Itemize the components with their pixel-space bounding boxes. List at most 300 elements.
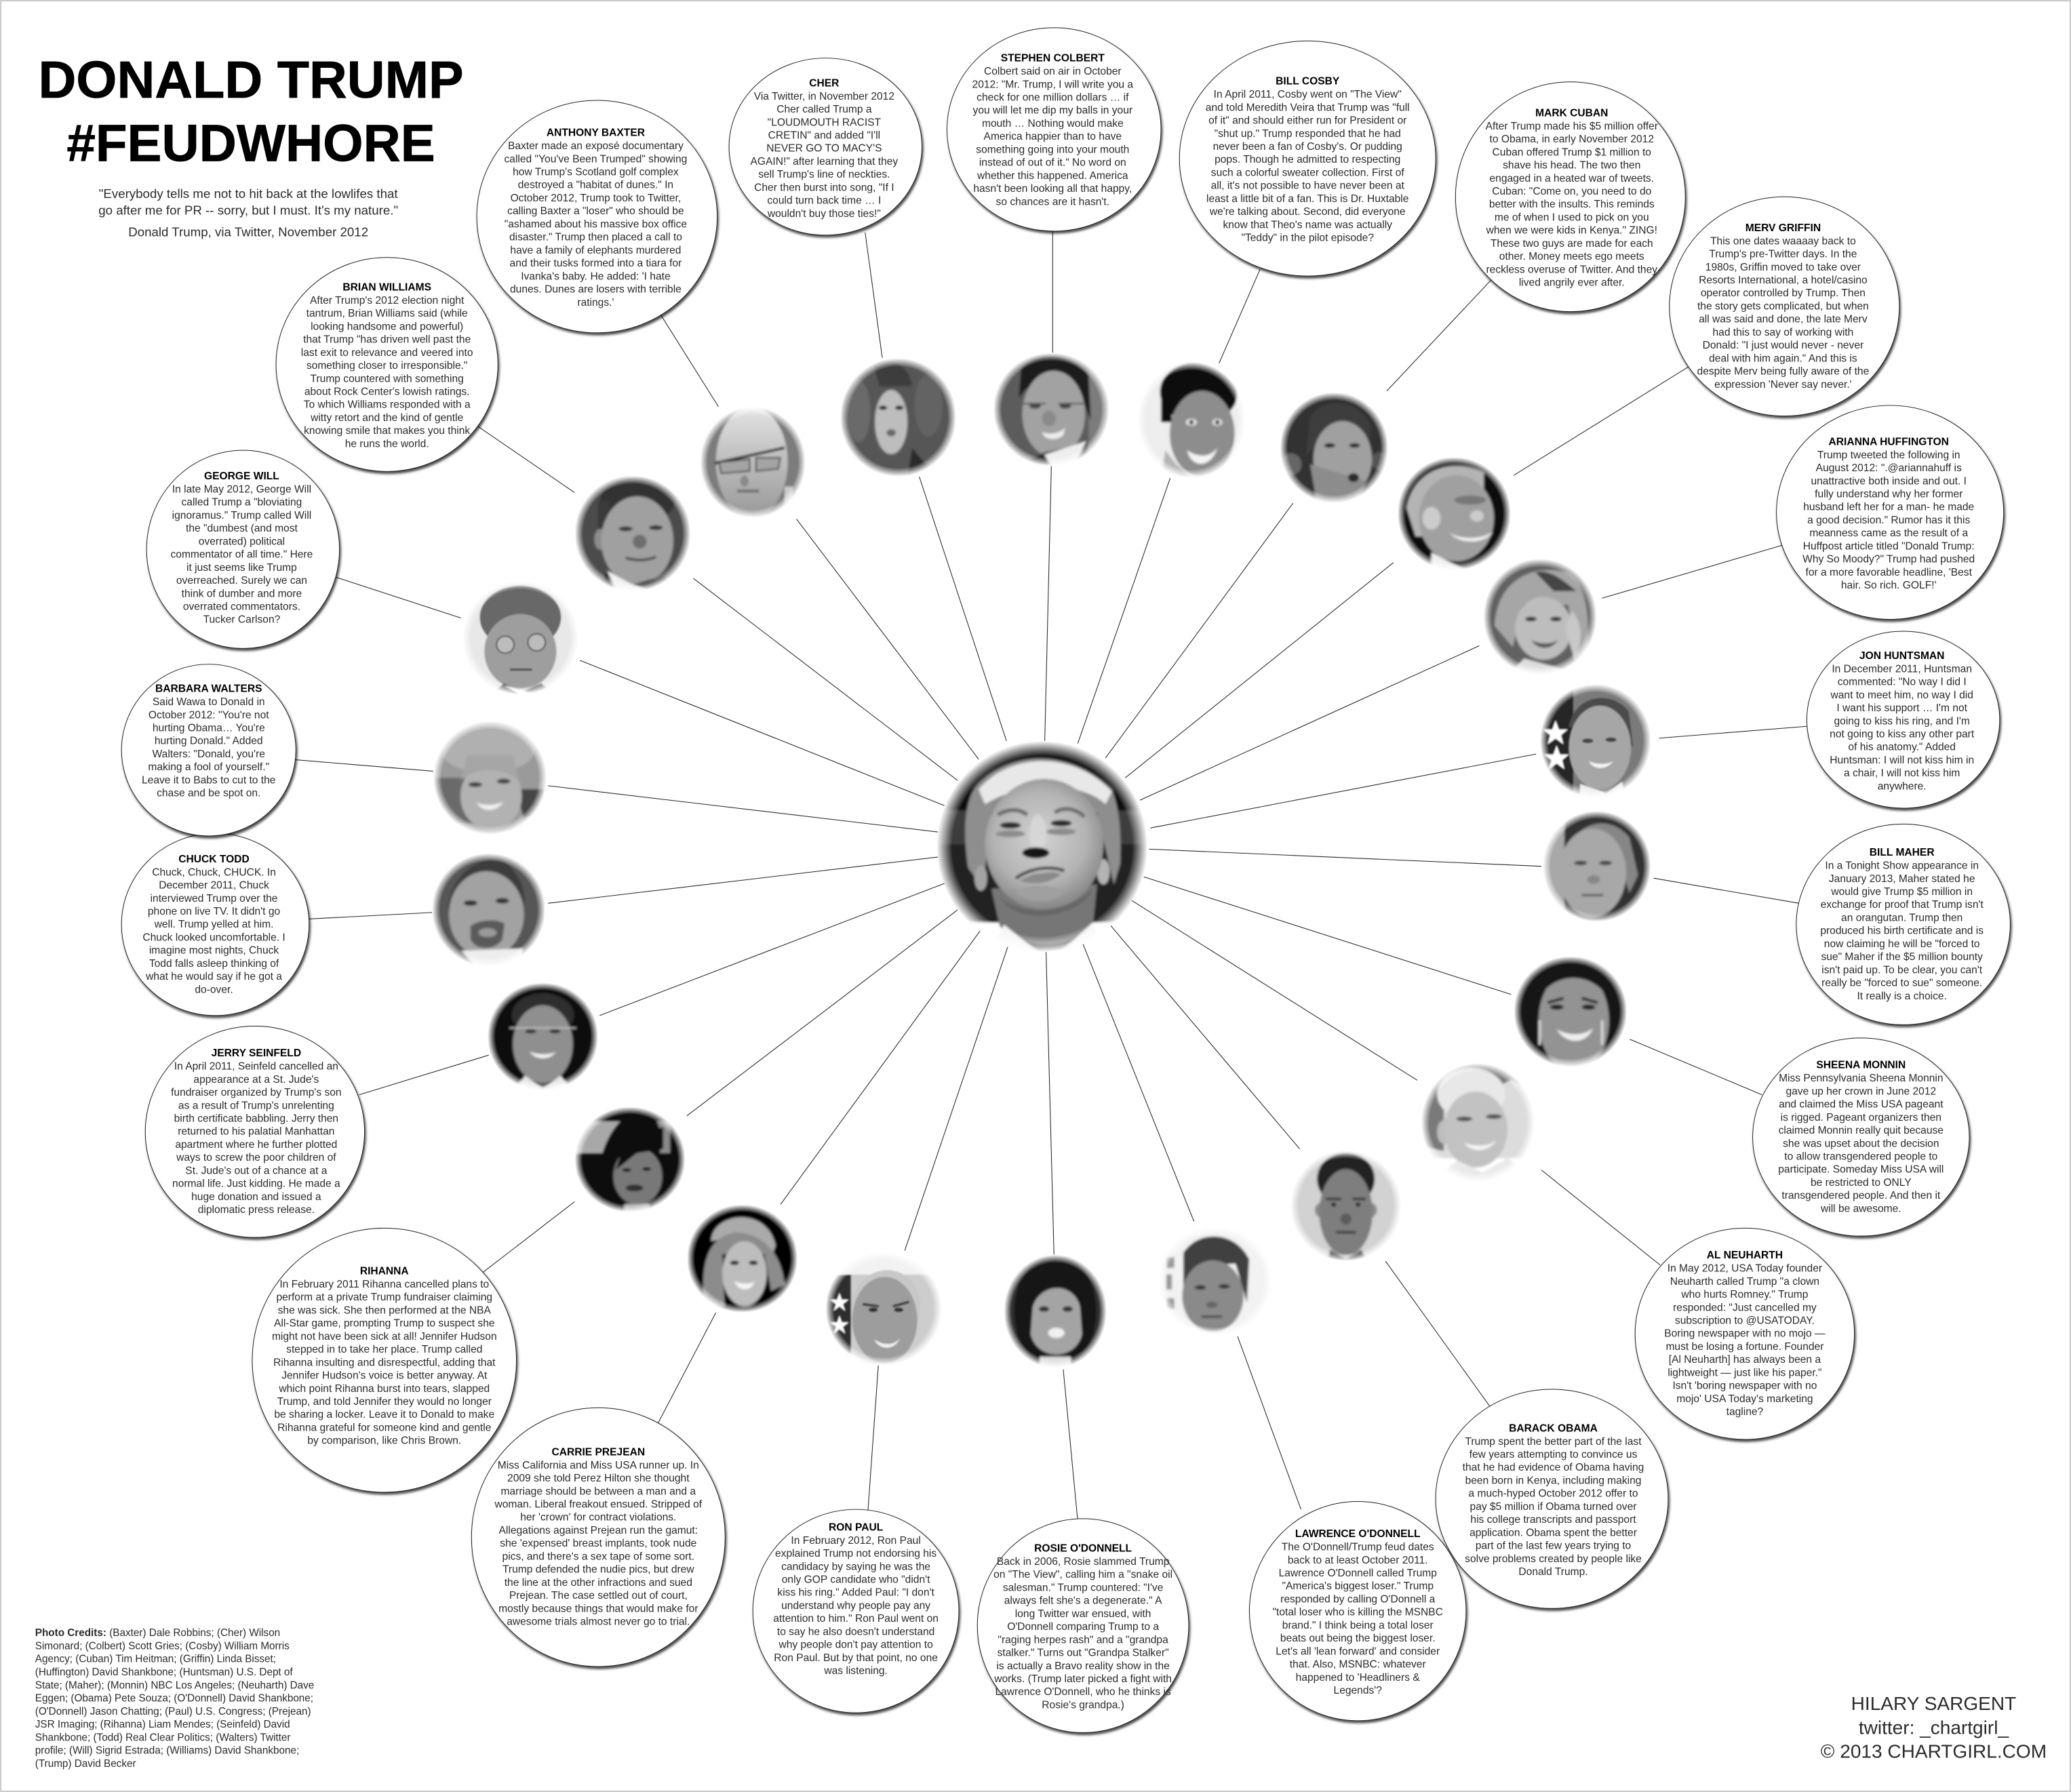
quote: go after me for PR -- sorry, but I must. It's my nature." [98, 203, 398, 217]
body: claimed Monnin really quit because [1779, 1125, 1944, 1136]
name: BILL MAHER [1870, 847, 1935, 858]
bubble: Jon Huntsman [1807, 631, 2000, 808]
body: candidacy by saying he was the [781, 1561, 930, 1572]
name: JERRY SEINFELD [212, 1048, 301, 1059]
body: she 'expensed' breast implants, took nude [500, 1538, 696, 1549]
name: BILL COSBY [1276, 76, 1340, 87]
body: Isn't 'boring newspaper with no [1672, 1380, 1817, 1392]
photo: Brian Williams [574, 475, 691, 592]
title: #FEUDWHORE [66, 115, 435, 173]
body: 2009 she told Perez Hilton she thought [507, 1473, 690, 1484]
body: Trump tweeted the following in [1817, 450, 1960, 461]
body: Back in 2006, Rosie slammed Trump [997, 1556, 1170, 1568]
body: mostly because things that would make for [498, 1603, 698, 1614]
photo credits: JSR Imaging; (Rihanna) Liam Mendes; (Seinfeld) David [35, 1719, 290, 1730]
body: CRETIN" and added "I'll [768, 130, 880, 142]
body: other. Money meets ego meets [1499, 251, 1644, 262]
body: In May 2012, USA Today founder [1668, 1263, 1822, 1275]
photo credits: (Baxter) Dale Robbins; (Cher) Wilson [106, 1627, 280, 1639]
photo: Merv Griffin [1398, 457, 1511, 570]
body: pics, and there's a sex tape of some sort. [502, 1551, 694, 1562]
body: last exit to relevance and veered into [301, 347, 473, 359]
bubble: Stephen Colbert [947, 28, 1161, 231]
bubble: Bill Cosby [1179, 41, 1436, 276]
body: husband left her for a man- he made [1803, 502, 1974, 513]
body: the "dumbest (and most [186, 523, 298, 534]
body: a chair, I will not kiss him [1844, 768, 1960, 779]
body: called Trump a "bloviating [181, 497, 302, 509]
bubble: Arianna Huffington [1777, 405, 2004, 619]
body: Trump, and told Jennifer they would no longer [277, 1396, 492, 1408]
photo: Anthony Baxter [700, 407, 806, 517]
body: tagline? [1727, 1406, 1764, 1418]
body: Donald: "I just would never - never [1703, 340, 1863, 351]
body: Miss Pennsylvania Sheena Monnin [1779, 1073, 1944, 1084]
body: how Trump's Scotland golf complex [513, 167, 679, 178]
body: few years attempting to convince us [1470, 1449, 1638, 1460]
body: mojo' USA Today's marketing [1676, 1393, 1813, 1405]
body: After Trump's 2012 election night [310, 295, 465, 306]
body: making a fool of yourself." [148, 761, 269, 773]
name: ARIANNA HUFFINGTON [1829, 436, 1949, 447]
body: gave up her crown in June 2012 [1786, 1086, 1936, 1097]
body: hurting Donald." Added [155, 736, 263, 747]
photo credits: Shankbone; (Todd) Real Clear Politics; (Walters) Twitter [35, 1732, 291, 1743]
body: ratings.' [577, 297, 614, 308]
photo credits: (Huffington) David Shankbone; (Huntsman) U.S. Dept of [35, 1667, 293, 1678]
body: woman. Liberal freakout ensued. Stripped of [494, 1498, 703, 1510]
body: Cher called Trump a [776, 104, 872, 115]
quote: Donald Trump, via Twitter, November 2012 [128, 225, 368, 239]
body: witty retort and the kind of gentle [310, 412, 463, 424]
body: In December 2011, Huntsman [1832, 663, 1972, 675]
photo: Ron Paul [825, 1252, 942, 1366]
body: expression 'Never say never.' [1714, 379, 1852, 391]
body: O'Donnell comparing Trump to a [1007, 1621, 1159, 1633]
name: MARK CUBAN [1535, 107, 1608, 119]
body: be restricted to ONLY [1811, 1177, 1912, 1189]
body: Let's all 'lean forward' and consider [1276, 1646, 1440, 1657]
body: It really is a choice. [1857, 991, 1947, 1002]
body: dunes. Dunes are losers with terrible [510, 284, 682, 296]
body: huge donation and issued a [191, 1191, 321, 1203]
body: an orangutan. Trump then [1841, 912, 1962, 923]
body: overrated commentators. [183, 601, 300, 612]
body: and told Meredith Veira that Trump was "full [1206, 102, 1410, 113]
name: JON HUNTSMAN [1859, 650, 1944, 662]
body: you will let me dip my balls in your [973, 105, 1132, 117]
body: Huffpost article titled "Donald Trump: [1803, 540, 1975, 552]
body: something closer to irresponsible." [307, 360, 467, 372]
bubble: Sheena Monnin [1753, 1038, 1969, 1236]
body: by comparison, like Chris Brown. [307, 1435, 461, 1447]
body: exchange for proof that Trump isn't [1821, 899, 1984, 911]
body: hasn't been looking all that happy, [973, 183, 1132, 195]
bubble: Brian Williams [276, 258, 498, 471]
bubble: Chuck Todd [121, 833, 309, 1016]
photo: Mark Cuban [1280, 392, 1388, 503]
body: not going to kiss any other part [1830, 728, 1975, 740]
body: In a Tonight Show appearance in [1825, 860, 1979, 872]
photo credits: State; (Maher); (Monnin) NBC Los Angeles; (Neuharth) Dave [35, 1679, 314, 1691]
photo: Bill Cosby [1137, 361, 1246, 478]
body: such a colorful sweater collection. First of [1211, 167, 1404, 178]
body: explained Trump not endorsing his [775, 1548, 936, 1559]
body: attention to him." Ron Paul went on [773, 1613, 939, 1625]
name: ROSIE O'DONNELL [1034, 1543, 1132, 1555]
body: imagine most nights, Chuck [149, 945, 279, 957]
body: perform at a private Trump fundraiser claiming [276, 1292, 492, 1303]
body: the story gets complicated, but when [1697, 300, 1869, 312]
body: something going into your mouth [976, 144, 1129, 155]
bubble: Barbara Walters [121, 664, 296, 836]
body: Chuck looked uncomfortable. I [142, 932, 285, 943]
body: tantrum, Brian Williams said (while [307, 308, 468, 319]
bubble: Carrie Prejean [471, 1408, 725, 1667]
author credit [1821, 1693, 2047, 1761]
photo: Chuck Todd [432, 853, 545, 967]
body: least a little bit of a fan. This is Dr. Huxtable [1206, 193, 1408, 205]
body: chase and be spot on. [157, 788, 260, 799]
body: is rigged. Pageant organizers then [1781, 1112, 1941, 1123]
quote [98, 186, 398, 239]
body: October 2012: "You're not [149, 709, 269, 721]
body: his college transcripts and passport [1470, 1514, 1636, 1526]
body: Why So Moody?" Trump had pushed [1802, 554, 1975, 565]
body: the line at the other infractions and sued [505, 1577, 692, 1589]
body: me of when I used to pick on you [1495, 212, 1649, 223]
body: whether this happened. America [977, 170, 1128, 182]
body: despite Merv being fully aware of the [1697, 366, 1869, 378]
body: Tucker Carlson? [203, 614, 281, 626]
body: deal with him again." And this is [1709, 353, 1857, 364]
photo credits: (Trump) David Becker [35, 1758, 136, 1770]
body: mouth … Nothing would make [982, 118, 1124, 130]
body: Todd falls asleep thinking of [149, 958, 279, 970]
body: "ashamed about his massive box office [505, 218, 687, 230]
body: St. Jude's out of a chance at a [185, 1165, 328, 1176]
body: anywhere. [1878, 780, 1927, 792]
body: we're talking about. Second, did everyone [1209, 206, 1406, 218]
body: of it" and should either run for President or [1208, 115, 1406, 127]
body: must be losing a fortune. Founder [1665, 1341, 1823, 1353]
body: The O'Donnell/Trump feud dates [1282, 1542, 1434, 1553]
body: responded: "Just cancelled my [1673, 1302, 1817, 1313]
body: Trump countered with something [311, 373, 464, 384]
body: I want his support … I'm not [1836, 702, 1968, 714]
photo credits: Photo Credits: [35, 1627, 106, 1639]
body: Colbert said on air in October [984, 66, 1122, 77]
body: ways to screw the poor children of [176, 1152, 336, 1163]
body: Trump defended the nudie pics, but drew [502, 1564, 694, 1576]
body: operator controlled by Trump. Then [1701, 287, 1866, 299]
body: Baxter made an exposé documentary [508, 140, 684, 152]
body: overreached. Surely we can [176, 575, 307, 586]
author credit: twitter: _chartgirl_ [1859, 1717, 2009, 1738]
body: In February 2011 Rihanna cancelled plans to [279, 1279, 490, 1290]
body: Walters: "Donald, you're [153, 749, 265, 760]
body: knowing smile that makes you think [304, 425, 470, 437]
body: In April 2011, Cosby went on "The View" [1214, 89, 1402, 100]
body: "Teddy" in the pilot episode? [1241, 233, 1374, 244]
body: commented: "No way I did I [1838, 677, 1967, 688]
body: Lawrence O'Donnell called Trump [1279, 1568, 1437, 1579]
body: Allegations against Prejean run the gamut: [499, 1525, 698, 1536]
body: In February 2012, Ron Paul [791, 1535, 921, 1547]
photo: George Will [462, 581, 578, 694]
body: Cher then burst into song, "If I [754, 182, 894, 193]
title: DONALD TRUMP [38, 51, 464, 109]
body: stalker." Turns out "Grandpa Stalker" [998, 1648, 1169, 1659]
body: Miss California and Miss USA runner up. In [498, 1460, 699, 1471]
body: looking handsome and powerful) [311, 321, 463, 332]
bubble: Jerry Seinfeld [145, 1026, 365, 1237]
body: destroyed a "habitat of dunes." In [518, 180, 673, 191]
body: for a more favorable headline, 'Best [1805, 567, 1973, 578]
body: had this to say of working with [1712, 327, 1853, 338]
body: might not have been sick at all! Jennifer Hudson [272, 1331, 497, 1342]
photo: Arianna Huffington [1483, 559, 1597, 675]
body: engaged in a heated war of tweets. [1490, 173, 1654, 184]
title [38, 51, 464, 173]
body: wouldn't buy those ties!" [767, 208, 881, 220]
photo: Barbara Walters [433, 721, 547, 835]
body: Legends'? [1334, 1685, 1382, 1696]
body: about Rock Center's lowish ratings. [304, 386, 470, 398]
body: participate. Someday Miss USA will [1778, 1164, 1944, 1176]
body: who hurts Romney." Trump [1680, 1289, 1809, 1300]
body: August 2012: ".@ariannahuff is [1816, 462, 1962, 474]
body: Rihanna grateful for someone kind and gentle [277, 1422, 491, 1433]
body: disaster." Trump then placed a call to [509, 232, 682, 243]
body: This one dates waaaay back to [1710, 235, 1856, 247]
body: Leave it to Babs to cut to the [142, 774, 275, 786]
body: going to kiss his ring, and I'm [1834, 715, 1970, 727]
body: Ron Paul. But by that point, no one [774, 1652, 938, 1664]
body: 1980s, Griffin moved to take over [1705, 262, 1861, 273]
body: solve problems created by people like [1465, 1553, 1642, 1565]
photo: Carrie Prejean [687, 1204, 797, 1313]
body: Donald Trump. [1518, 1566, 1588, 1578]
body: birth certificate babbling. Jerry then [174, 1113, 338, 1125]
body: [Al Neuharth] has always been a [1669, 1354, 1821, 1366]
body: her 'crown' for contract violations. [520, 1512, 676, 1524]
body: that. Also, MSNBC: whatever [1290, 1659, 1426, 1671]
bubble: Bill Maher [1796, 824, 2010, 1024]
body: think of dumber and more [182, 588, 302, 599]
body: pops. Though he admitted to respecting [1215, 154, 1400, 165]
body: marriage should be between a man and a [501, 1486, 696, 1497]
author credit: HILARY SARGENT [1851, 1693, 2016, 1714]
photo: Sheena Monnin [1514, 956, 1628, 1071]
body: want to meet him, no way I did [1830, 690, 1973, 701]
body: happened to 'Headliners & [1296, 1672, 1420, 1684]
body: when we were kids in Kenya." ZING! [1486, 225, 1657, 237]
photo: Al Neuharth [1421, 1063, 1535, 1182]
body: Boring newspaper with no mojo — [1664, 1328, 1826, 1340]
name: GEORGE WILL [204, 471, 279, 482]
body: have a family of elephants murdered [510, 245, 681, 256]
name: STEPHEN COLBERT [1001, 53, 1105, 64]
body: sue" Maher if the $5 million bounty [1821, 951, 1983, 963]
body: back to at least October 2011. [1288, 1555, 1428, 1566]
body: America happier than to have [984, 131, 1122, 142]
body: it just seems like Trump [186, 562, 297, 574]
body: interviewed Trump over the [151, 893, 277, 904]
body: transgendered people. And then it [1781, 1190, 1941, 1201]
body: phone on live TV. It didn't go [148, 906, 280, 917]
body: to allow transgendered people to [1784, 1151, 1938, 1162]
body: Lawrence O'Donnell, who he thinks is [995, 1686, 1171, 1698]
body: All-Star game, prompting Trump to suspect she [274, 1318, 495, 1330]
body: Chuck, Chuck, CHUCK. In [152, 867, 276, 878]
bubble: Lawrence O'Donnell [1250, 1502, 1466, 1721]
body: reckless overuse of Twitter. And they [1486, 264, 1657, 275]
body: To which Williams responded with a [304, 399, 471, 411]
name: RIHANNA [360, 1266, 409, 1277]
body: really be "forced to sue" someone. [1821, 978, 1982, 989]
body: Ivanka's baby. He added: 'I hate [521, 271, 671, 282]
photo credits: Agency; (Cuban) Tim Heitman; (Griffin) Linda Bisset; [35, 1654, 276, 1665]
photo: Cher [840, 358, 956, 477]
body: better with the insults. This reminds [1489, 199, 1655, 210]
photo: Lawrence O'Donnell [1164, 1232, 1267, 1333]
body: pay $5 million if Obama turned over [1470, 1501, 1636, 1513]
photo credits: Eggen; (Obama) Pete Souza; (O'Donnell) David Shankbone; [35, 1693, 313, 1705]
body: apartment where he further plotted [175, 1139, 337, 1151]
photo: Barack Obama [1290, 1150, 1402, 1261]
body: understand why people pay any [781, 1600, 930, 1612]
body: all was said and done, the late Merv [1699, 314, 1868, 325]
body: fundraiser organized by Trump's son [171, 1087, 342, 1098]
body: stepped in to take her place. Trump called [286, 1344, 482, 1355]
body: Resorts International, a hotel/casino [1699, 275, 1868, 286]
body: he runs the world. [345, 438, 429, 450]
body: Huntsman: I will not kiss him in [1830, 755, 1974, 766]
body: overrated) political [199, 536, 285, 547]
body: January 2013, Maher stated he [1829, 873, 1975, 885]
name: ANTHONY BAXTER [547, 127, 645, 139]
body: Neuharth called Trump "a clown [1670, 1276, 1819, 1288]
body: Jennifer Hudson's voice is better anyway. At [281, 1370, 488, 1382]
body: called "You've Been Trumped" showing [505, 153, 687, 165]
body: on "The View", calling him a "snake oil [993, 1569, 1172, 1580]
bubble: Ron Paul [753, 1509, 959, 1713]
body: unattractive both inside and out. I [1811, 475, 1967, 487]
connector lines [290, 231, 1807, 1521]
body: "LOUDMOUTH RACIST [768, 117, 882, 128]
body: lightweight — just like his paper." [1668, 1367, 1822, 1378]
photo: Jon Huntsman [1540, 684, 1651, 797]
body: do-over. [195, 984, 233, 995]
body: that he had evidence of Obama having [1463, 1462, 1644, 1473]
name: AL NEUHARTH [1707, 1250, 1783, 1261]
body: Prejean. The case settled out of court, [509, 1590, 688, 1601]
photo: Jerry Seinfeld [488, 982, 598, 1091]
bubble: Cher [729, 58, 922, 235]
body: to Obama, in early November 2012 [1490, 134, 1654, 145]
body: check for one million dollars … if [977, 92, 1129, 103]
body: Rosie's grandpa.) [1042, 1699, 1124, 1711]
bubble: Al Neuharth [1635, 1228, 1855, 1439]
body: was listening. [823, 1665, 888, 1677]
body: In late May 2012, George Will [172, 483, 311, 495]
body: salesman." Trump countered: "I've [1003, 1582, 1163, 1593]
photo: Rosie O'Donnell [1004, 1254, 1107, 1368]
bubble: George Will [146, 450, 340, 648]
quote: "Everybody tells me not to hit back at the lowlifes that [99, 186, 398, 201]
photo credits: profile; (Will) Sigrid Estrada; (Williams) David Shankbone; [35, 1745, 299, 1757]
body: produced his birth certificate and is [1820, 925, 1984, 937]
photo credits: Simonard; (Colbert) Scott Gries; (Cosby) William Morris [35, 1640, 290, 1652]
body: beats out being the biggest loser. [1280, 1633, 1436, 1644]
body: instead of out of it." No word on [979, 157, 1126, 169]
body: December 2011, Chuck [159, 880, 269, 892]
photo: Bill Maher [1543, 811, 1651, 921]
body: could turn back time … I [767, 195, 881, 207]
body: now claiming he will be "forced to [1824, 938, 1980, 950]
body: all, it's not possible to have never been at [1211, 180, 1405, 192]
body: of his anatomy." Added [1848, 742, 1956, 753]
body: Cuban offered Trump $1 million to [1493, 146, 1651, 158]
body: what he would say if he got a [145, 971, 282, 982]
body: shave his head. The two then [1503, 160, 1640, 172]
body: awesome trials almost never go to trial. [507, 1616, 690, 1628]
body: why people don't pay attention to [778, 1639, 933, 1651]
name: SHEENA MONNIN [1816, 1060, 1906, 1071]
body: After Trump made his $5 million offer [1486, 121, 1658, 132]
body: meanness came as the result of a [1809, 527, 1968, 539]
body: "raging herpes rash" and a "grandpa [998, 1634, 1168, 1646]
body: fully understand why her former [1815, 489, 1962, 500]
bubble: Rosie O'Donnell [977, 1519, 1189, 1732]
body: AGAIN!" after learning that they [751, 156, 898, 167]
photo: Rihanna [574, 1107, 686, 1212]
body: "total loser who is killing the MSNBC [1273, 1607, 1443, 1618]
body: as a result of Trump's unrelenting [178, 1100, 334, 1111]
body: normal life. Just kidding. He made a [172, 1178, 340, 1190]
photo credits: (O'Donnell) Jason Chatting; (Paul) U.S. Congress; (Prejean) [35, 1706, 311, 1717]
body: application. Obama spent the better [1470, 1527, 1637, 1538]
body: and claimed the Miss USA pageant [1779, 1099, 1944, 1111]
body: she was upset about the decision [1783, 1138, 1939, 1149]
name: BARBARA WALTERS [155, 683, 262, 695]
body: would give Trump $5 million in [1830, 886, 1973, 898]
body: In April 2011, Seinfeld cancelled an [174, 1061, 338, 1073]
body: "America's biggest loser." Trump [1282, 1580, 1434, 1592]
bubble: Barack Obama [1436, 1389, 1668, 1608]
body: calling Baxter a "loser" who should be [507, 205, 684, 217]
body: to say he also doesn't understand [777, 1626, 934, 1637]
body: returned to his palatial Manhattan [178, 1126, 334, 1138]
photo: Stephen Colbert [993, 353, 1109, 466]
body: brand." I think being a total loser [1282, 1620, 1434, 1631]
body: that Trump "has driven well past the [303, 334, 471, 346]
body: so chances are it hasn't. [996, 196, 1109, 207]
body: appearance at a St. Jude's [193, 1074, 319, 1086]
photo: Donald Trump [936, 741, 1148, 952]
body: part of the last few years trying to [1476, 1540, 1632, 1552]
name: BARACK OBAMA [1509, 1422, 1598, 1434]
body: only GOP candidate who "didn't [782, 1574, 930, 1586]
body: diplomatic press release. [198, 1204, 315, 1216]
body: been born in Kenya, including making [1465, 1475, 1641, 1486]
body: ignoramus." Trump called Will [172, 510, 311, 521]
name: LAWRENCE O'DONNELL [1295, 1528, 1421, 1540]
body: and their tusks formed into a tiara for [510, 258, 682, 269]
body: Trump's pre-Twitter days. In the [1709, 249, 1857, 260]
name: CARRIE PREJEAN [551, 1446, 645, 1458]
